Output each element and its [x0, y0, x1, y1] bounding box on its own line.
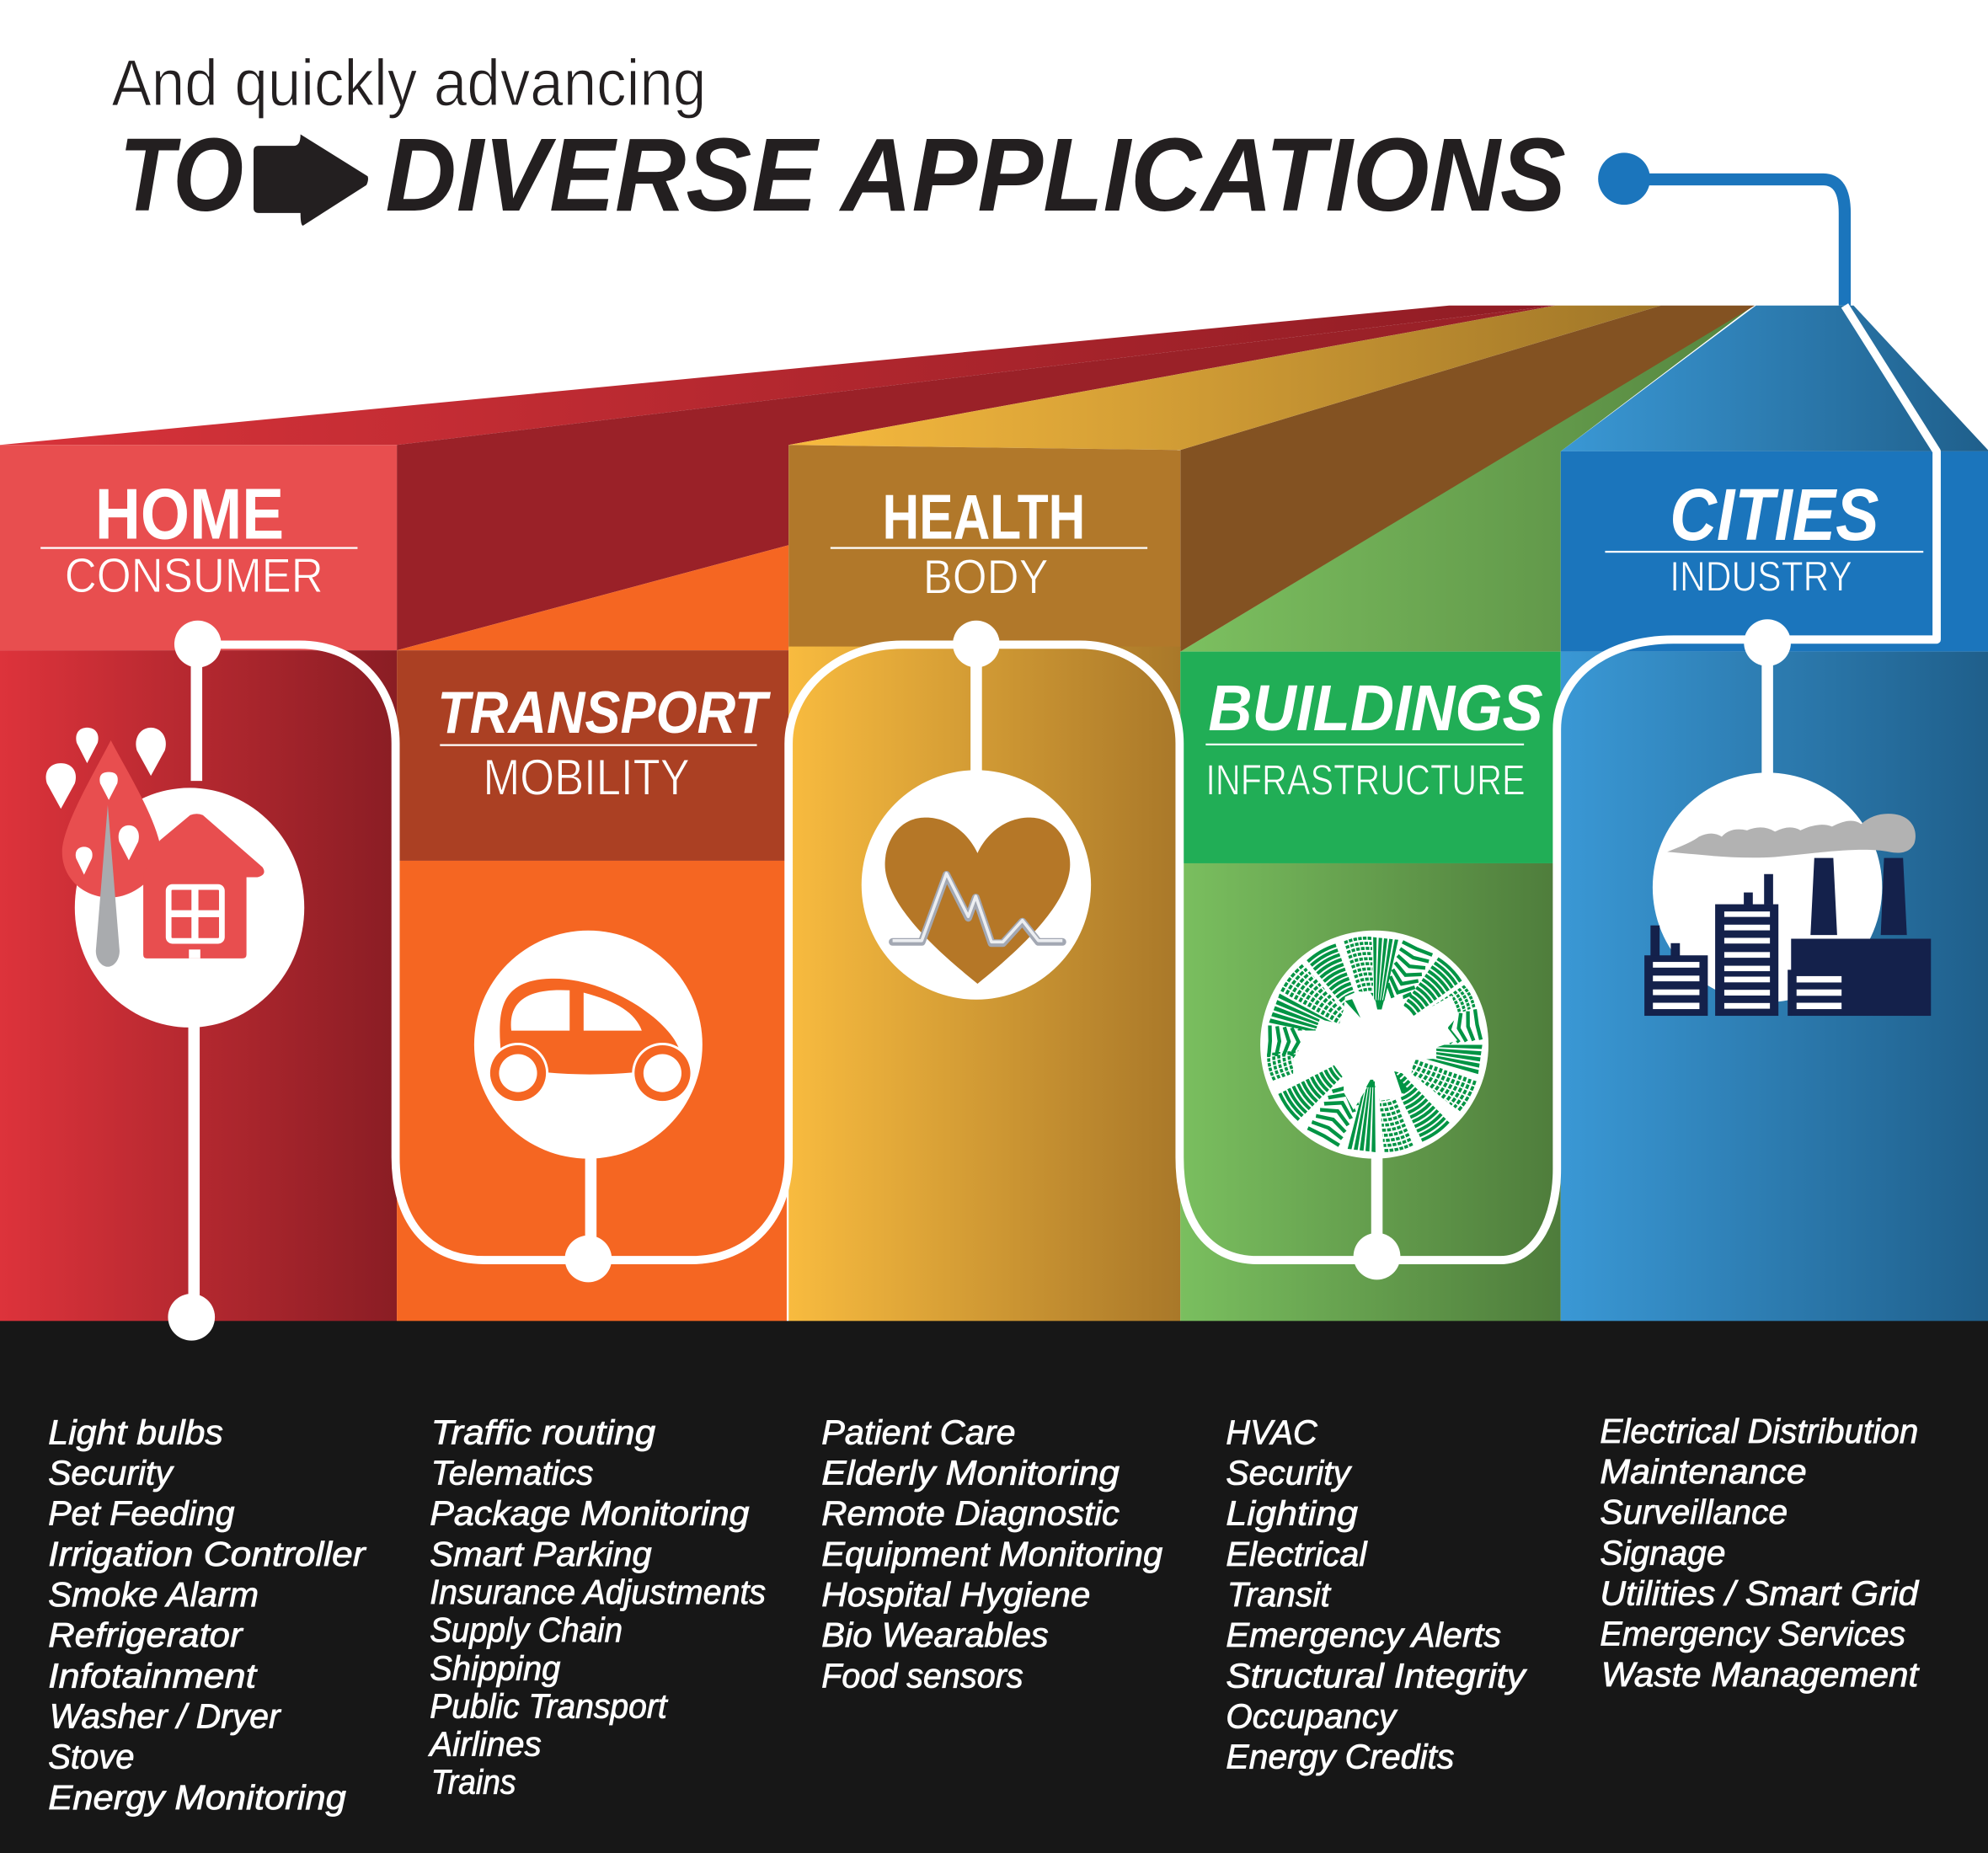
panel: black list footer — [0, 1321, 1988, 1853]
list: home applications: Refrigerator — [48, 1615, 243, 1654]
list: health applications: Equipment Monitoring — [821, 1535, 1163, 1573]
list: home applications — [48, 1412, 366, 1817]
list: home applications: Energy Monitoring — [48, 1778, 346, 1817]
list: health applications: Elderly Monitoring — [821, 1453, 1120, 1492]
panel: transport: TRANSPORT — [437, 679, 772, 745]
list: transport applications: Smart Parking — [430, 1535, 652, 1573]
list: cities applications: Electrical Distribution — [1600, 1412, 1918, 1450]
list: cities applications: Waste Management — [1601, 1655, 1920, 1694]
list: home applications: Irrigation Controller — [48, 1535, 366, 1573]
icon: skyscrapers viewed from below — [1260, 931, 1488, 1159]
list: transport applications: Supply Chain — [430, 1610, 623, 1649]
route nodes and stems — [168, 619, 1791, 1341]
panel: health — [787, 445, 1180, 1322]
panel: cities — [1561, 451, 1988, 1322]
list: cities applications: Surveillance — [1600, 1493, 1788, 1531]
list: health applications — [821, 1412, 1163, 1695]
list: transport applications: Insurance Adjustments — [430, 1573, 766, 1611]
list: health applications: Hospital Hygiene — [821, 1575, 1090, 1614]
list: cities applications: Signage — [1600, 1533, 1725, 1572]
list: buildings applications: Structural Integrity — [1226, 1656, 1528, 1695]
list: buildings applications: Energy Credits — [1226, 1738, 1454, 1776]
icon: heart with pulse — [862, 770, 1091, 1000]
list: home applications: Pet Feeding — [48, 1494, 235, 1533]
list: buildings applications — [1226, 1412, 1528, 1776]
list: transport applications: Shipping — [430, 1648, 561, 1687]
list: transport applications: Package Monitoring — [430, 1494, 750, 1533]
list: transport applications — [428, 1412, 766, 1802]
list: cities applications: Utilities / Smart Grid — [1600, 1573, 1920, 1612]
list: buildings applications: Occupancy — [1226, 1696, 1398, 1735]
title: TO arrow DIVERSE APPLICATIONS: DIVERSE APPLICATIONS — [386, 117, 1566, 233]
panel: buildings — [1180, 652, 1561, 1322]
list: home applications: Smoke Alarm — [48, 1575, 259, 1614]
list: home applications: Stove — [48, 1738, 135, 1776]
list: home applications: Washer / Dryer — [50, 1696, 281, 1735]
list: cities applications: Emergency Services — [1600, 1615, 1905, 1653]
panel: transport: MOBILITY — [483, 750, 690, 806]
panel: health: BODY — [923, 550, 1049, 604]
list: buildings applications: Security — [1226, 1453, 1353, 1492]
list: home applications: Security — [48, 1453, 174, 1492]
panel: buildings: BUILDINGS — [1208, 673, 1543, 745]
list: buildings applications: Emergency Alerts — [1226, 1615, 1501, 1654]
icon: car — [474, 931, 703, 1159]
panel: health: HEALTH — [883, 482, 1085, 553]
heading: And quickly advancing: And quickly advancing — [111, 45, 706, 120]
panel: home: CONSUMER — [65, 549, 323, 603]
panel: home: HOME — [95, 474, 284, 555]
panel: cities: CITIES — [1670, 474, 1879, 556]
list: cities applications — [1600, 1412, 1920, 1694]
connector: white winding route — [198, 306, 1937, 1260]
list: cities applications: Maintenance — [1600, 1452, 1807, 1491]
title: TO arrow DIVERSE APPLICATIONS: TO — [119, 117, 243, 233]
icon: title arrow — [254, 135, 368, 226]
perspective roofs and side walls — [0, 306, 1988, 652]
list: buildings applications: Transit — [1227, 1575, 1332, 1614]
panel: home — [0, 445, 397, 1322]
list: transport applications: Telematics — [431, 1453, 593, 1492]
list: buildings applications: Electrical — [1226, 1535, 1367, 1573]
list: transport applications: Airlines — [428, 1725, 542, 1764]
list: transport applications: Trains — [431, 1763, 516, 1802]
panel: transport — [397, 650, 788, 1322]
list: health applications: Food sensors — [821, 1656, 1023, 1695]
panel: buildings: INFRASTRUCTURE — [1205, 756, 1526, 804]
list: transport applications: Traffic routing — [431, 1412, 656, 1451]
list: transport applications: Public Transport — [430, 1686, 668, 1725]
icon: home with irrigation drops — [46, 728, 304, 1028]
list: health applications: Remote Diagnostic — [821, 1494, 1120, 1533]
icon: factory skyline with smoke — [1644, 772, 1931, 1016]
list: buildings applications: Lighting — [1226, 1494, 1358, 1533]
panel: cities: INDUSTRY — [1670, 553, 1852, 600]
list: home applications: Light bulbs — [48, 1412, 223, 1451]
list: health applications: Bio Wearables — [821, 1615, 1049, 1654]
list: home applications: Infotainment — [48, 1656, 258, 1695]
connector: blue line from title to cities — [1598, 152, 1845, 306]
list: buildings applications: HVAC — [1226, 1412, 1317, 1451]
list: health applications: Patient Care — [821, 1412, 1016, 1451]
